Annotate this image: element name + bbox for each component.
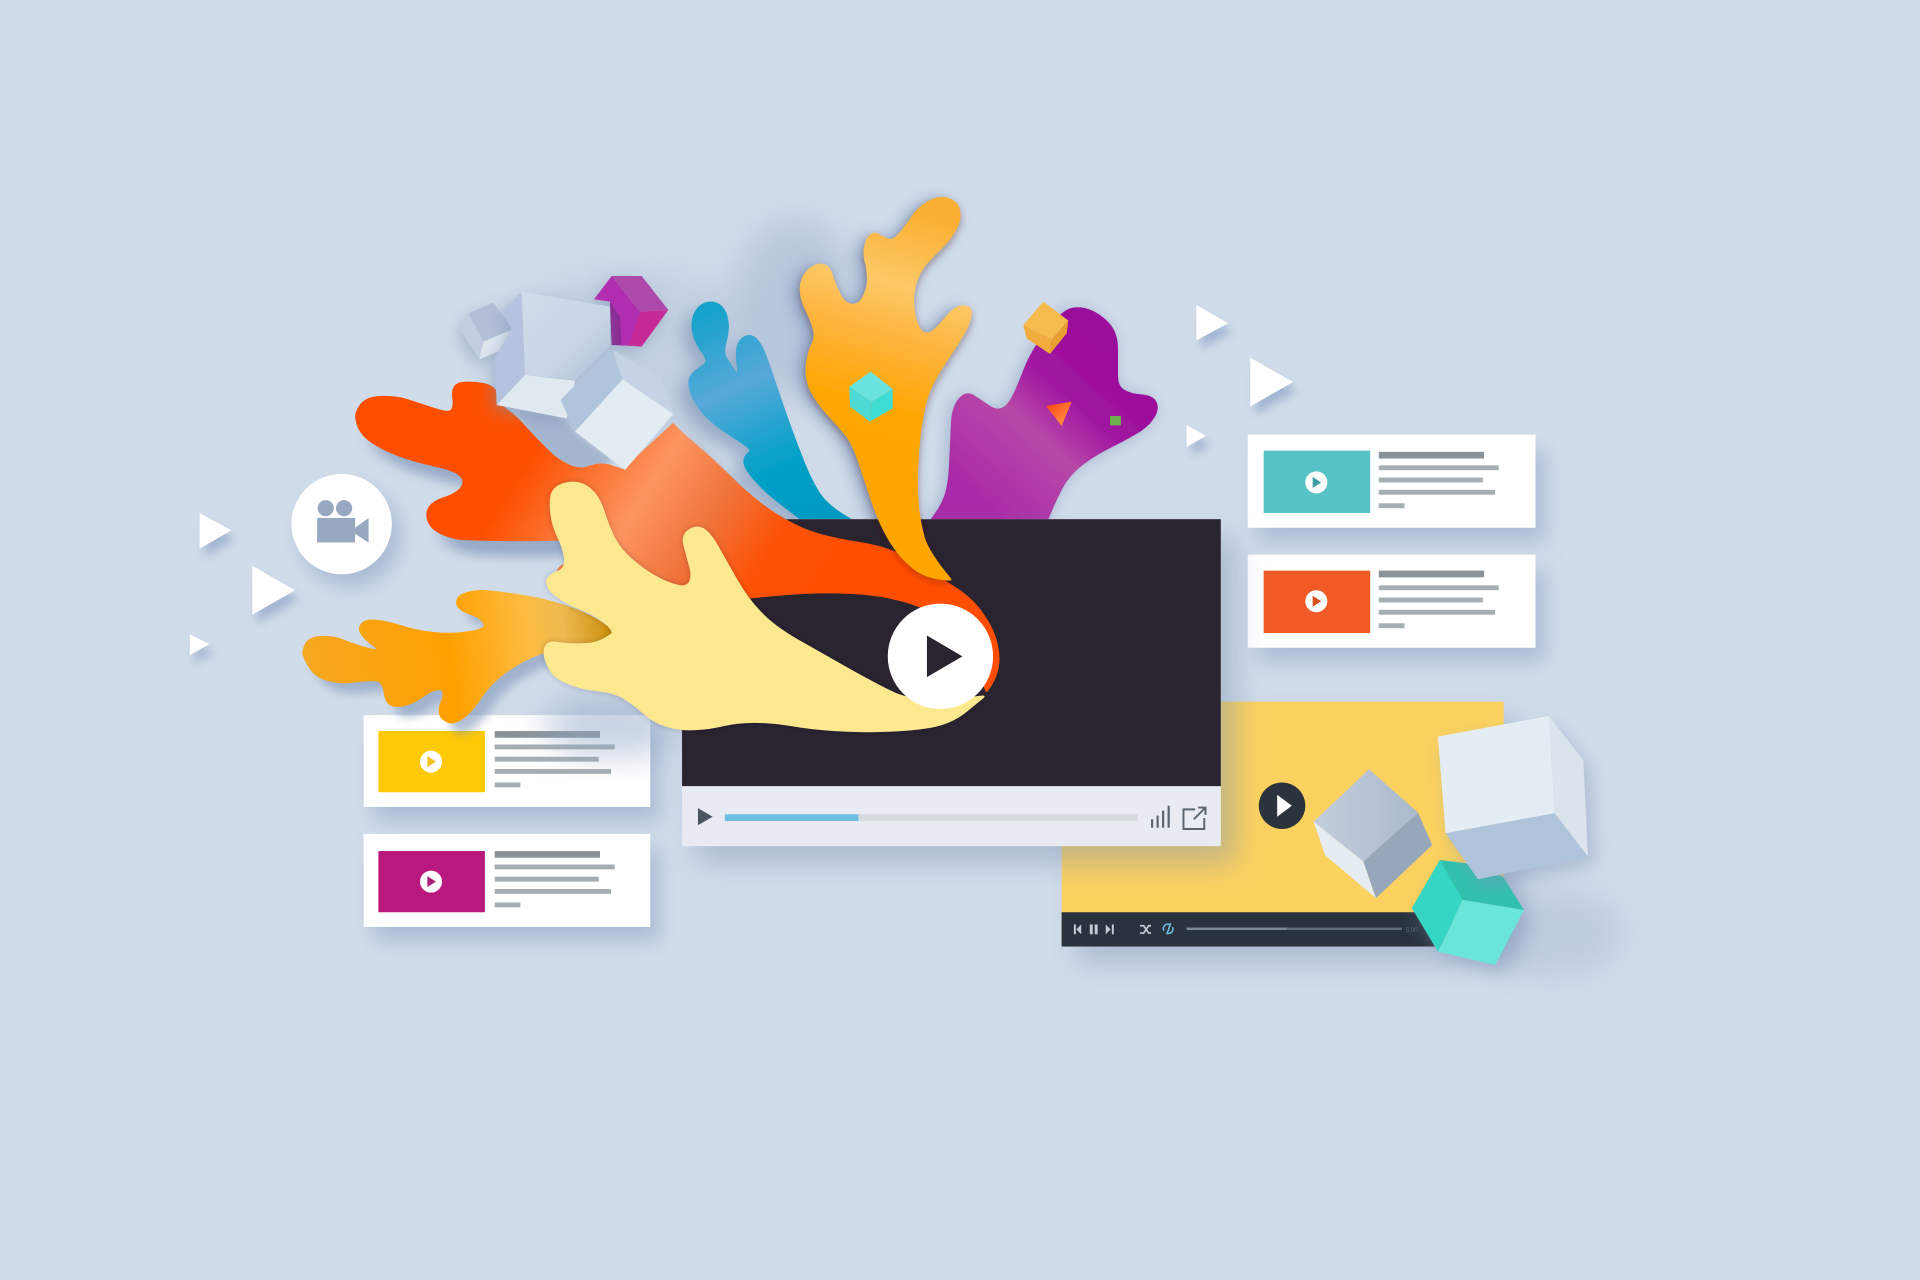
panel: left video card magenta	[364, 834, 650, 927]
panel: main video player	[682, 519, 1221, 846]
blob: amber centre	[801, 198, 971, 579]
panel: left video card yellow	[364, 715, 650, 807]
triangle: red on purple blob	[1046, 402, 1072, 426]
blob: amber lower finger	[303, 591, 613, 722]
splash blobs behind the screen	[690, 303, 1156, 523]
blob: pale yellow hand	[545, 483, 983, 731]
cube cluster top-left	[461, 276, 673, 470]
shadow under cubes on the background	[513, 407, 613, 473]
video screen	[682, 519, 1221, 786]
panel: right video card teal	[1248, 435, 1536, 528]
cubes on yellow player	[1314, 716, 1588, 965]
panel: right video card orange	[1248, 555, 1536, 648]
white play arrows: left cluster	[190, 513, 295, 655]
panel: yellow video player	[1062, 702, 1504, 947]
cube: grey	[1314, 769, 1432, 898]
cube: teal on amber blob	[849, 372, 893, 422]
main play button	[888, 604, 993, 709]
cube: periwinkle small	[461, 303, 513, 359]
icon: camera badge	[291, 474, 392, 574]
cube: orange on purple blob	[1023, 302, 1068, 354]
square: green on purple blob	[1110, 416, 1121, 425]
cube: large pale blue	[495, 292, 610, 418]
white play arrows: right cluster	[1187, 305, 1293, 447]
blob: orange-red main	[356, 382, 998, 691]
yellow player play button	[1259, 782, 1305, 829]
blob: purple	[932, 309, 1156, 523]
small objects on the fan blobs	[849, 302, 1121, 426]
main control bar	[698, 806, 1206, 829]
cube: large pale	[1438, 716, 1588, 879]
cast shadows on the background	[313, 201, 1012, 757]
blob: blue	[690, 303, 850, 523]
player control bar: 5:00	[1406, 927, 1418, 934]
cube: purple	[594, 276, 668, 347]
player control bar	[1062, 912, 1453, 947]
cube: lower pale blue	[561, 348, 673, 470]
cube: teal	[1412, 860, 1524, 965]
soft ground shadow of cube group	[1482, 889, 1624, 977]
